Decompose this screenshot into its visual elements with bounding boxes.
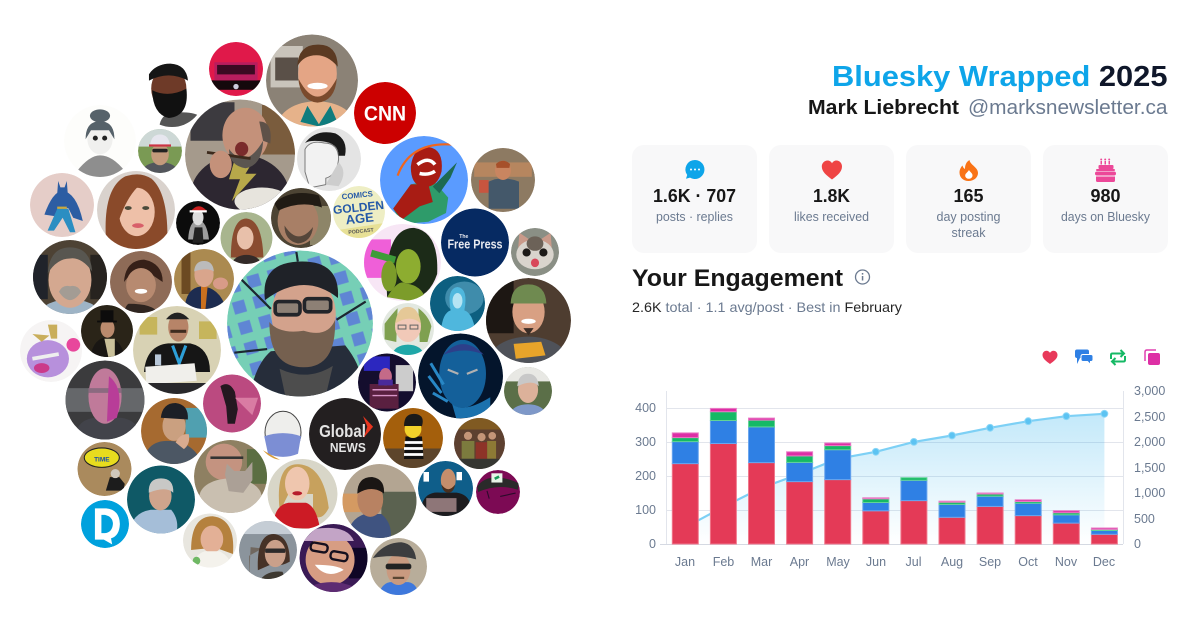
avatar: purple comic creature bbox=[20, 320, 82, 382]
stat value: 1.6K · 707 bbox=[653, 186, 736, 206]
cumulative area bbox=[685, 414, 1104, 544]
stat label: posts · replies bbox=[656, 210, 733, 224]
bars: replies bbox=[672, 420, 1117, 534]
icon: birthday cake bbox=[1095, 158, 1116, 182]
avatar: man in expos cap bbox=[138, 129, 182, 173]
month labels bbox=[675, 555, 1115, 569]
icon: info bbox=[856, 270, 870, 284]
avatar: woman with glasses on city rooftop bbox=[239, 521, 297, 579]
avatar: blue hooded figure bbox=[430, 276, 485, 331]
avatar: man in top hat bbox=[81, 305, 133, 357]
avatar: blue mystique cosplay bbox=[418, 334, 503, 418]
right axis labels: 2,500 bbox=[1134, 410, 1165, 424]
stat label: likes received bbox=[794, 210, 869, 224]
avatar: smiling woman with dark hair bbox=[110, 251, 172, 313]
right axis labels: 500 bbox=[1134, 512, 1155, 526]
avatar: line drawing of man bbox=[297, 127, 361, 191]
right axis labels: 0 bbox=[1134, 537, 1141, 551]
avatar: man in comic shop bbox=[471, 148, 535, 212]
left axis labels bbox=[635, 401, 656, 551]
avatar: man in dark cap close-up bbox=[271, 188, 331, 248]
right axis labels: 2,000 bbox=[1134, 435, 1165, 449]
avatar: man in cap resting chin on hand bbox=[141, 398, 207, 464]
panel: posts and replies stat bbox=[632, 145, 757, 253]
month labels: Feb bbox=[713, 555, 734, 569]
month labels: Oct bbox=[1018, 555, 1038, 569]
avatar: comedy time pin bbox=[78, 442, 132, 496]
icon: flame bbox=[960, 160, 978, 181]
avatar: Star Trek crew group photo bbox=[454, 418, 505, 469]
left axis labels: 300 bbox=[635, 435, 656, 449]
left axis labels: 400 bbox=[635, 401, 656, 415]
stat label second line: streak bbox=[952, 226, 986, 240]
avatar: man in X-Men shirt bbox=[486, 278, 571, 363]
panel: posting streak stat bbox=[906, 145, 1031, 253]
avatar: red-haired woman on green bbox=[220, 212, 272, 264]
month labels: Apr bbox=[790, 555, 809, 569]
stacked bar and line chart bbox=[635, 384, 1165, 569]
avatar: man in cap and sunglasses bbox=[370, 538, 427, 595]
avatar: main profile, man in cap under plaid umbrella bbox=[227, 250, 373, 396]
heading: your engagement: Your Engagement bbox=[632, 265, 843, 292]
stat label: days on Bluesky bbox=[1061, 210, 1151, 224]
avatar: gambit comic art bbox=[203, 374, 261, 432]
avatar: cartoon yellow burglar bbox=[383, 408, 443, 470]
stat label: day posting bbox=[936, 210, 1001, 224]
bars: quotes bbox=[672, 408, 1117, 529]
avatar: she-hulk comic art bbox=[364, 224, 441, 301]
month labels: Jul bbox=[906, 555, 921, 569]
legend icon: likes heart bbox=[1042, 351, 1058, 364]
avatar: politician pointing bbox=[174, 249, 234, 309]
left axis labels: 0 bbox=[649, 537, 656, 551]
right axis labels bbox=[1134, 384, 1165, 551]
avatar: grey-haired man smiling bbox=[33, 240, 107, 314]
icon: speech bubble bbox=[685, 160, 704, 179]
month labels: Dec bbox=[1093, 555, 1115, 569]
avatar: smiling man with glasses, purple tone bbox=[300, 524, 368, 592]
avatar: figure in purple-lit room bbox=[358, 354, 416, 412]
chart legend bbox=[1042, 350, 1160, 365]
avatar: sketch of woman with hair bun bbox=[78, 109, 123, 177]
stat value: 1.8K bbox=[813, 186, 850, 206]
avatar: blonde woman in red bbox=[268, 459, 338, 529]
right axis labels: 1,500 bbox=[1134, 461, 1165, 475]
avatar: santa hat figure in black and white bbox=[176, 201, 220, 245]
avatar: cartoon blonde woman with glasses bbox=[382, 303, 434, 355]
user name: Mark Liebrecht bbox=[808, 97, 959, 119]
legend icon: quotes copy squares bbox=[1145, 350, 1160, 365]
y grid bbox=[660, 391, 1124, 544]
engagement summary: 2.6K total · 1.1 avg/post · Best in February bbox=[632, 299, 902, 315]
avatar: man at Comic-Con panel bbox=[133, 306, 221, 394]
icon: heart bbox=[822, 160, 842, 180]
stat value: 165 bbox=[954, 186, 984, 206]
bars: likes bbox=[672, 444, 1117, 544]
cumulative line bbox=[685, 414, 1104, 527]
avatar: Global News logo bbox=[309, 398, 381, 470]
avatar: green and red comic hero bbox=[380, 136, 468, 224]
left axis labels: 100 bbox=[635, 503, 656, 517]
avatar: CNN logo bbox=[354, 82, 416, 144]
right axis labels: 3,000 bbox=[1134, 384, 1165, 398]
panel: days on Bluesky stat bbox=[1043, 145, 1168, 253]
month labels: Mar bbox=[751, 555, 772, 569]
title: Bluesky Wrapped 2025 bbox=[832, 61, 1168, 93]
avatar: bald man with magenta light bbox=[66, 360, 144, 440]
month labels: Aug bbox=[941, 555, 963, 569]
avatar: be reality logo bbox=[209, 42, 263, 96]
avatar: curly-haired woman bbox=[183, 514, 237, 568]
month labels: Jan bbox=[675, 555, 695, 569]
avatar: man holding grey cat bbox=[194, 440, 267, 515]
avatar: purple cartoon in hat bbox=[476, 470, 520, 514]
user handle: @marksnewsletter.ca bbox=[968, 97, 1168, 119]
left axis labels: 200 bbox=[635, 469, 656, 483]
avatar: man with collectibles shelf bbox=[266, 34, 358, 126]
stat value: 980 bbox=[1090, 186, 1120, 206]
bars: reposts bbox=[672, 412, 1117, 530]
month labels: Nov bbox=[1055, 555, 1078, 569]
legend icon: replies chat bubbles bbox=[1075, 350, 1093, 364]
month labels: Jun bbox=[866, 555, 886, 569]
month labels: May bbox=[826, 555, 851, 569]
panel: likes received stat bbox=[769, 145, 894, 253]
panel: avatar bubble cluster bbox=[20, 34, 571, 595]
avatar: red-haired woman bbox=[97, 171, 175, 249]
avatar: The Free Press logo bbox=[441, 208, 509, 276]
avatar: man in front of teal wall bbox=[127, 466, 195, 534]
avatar: man at sunset bbox=[342, 464, 416, 538]
avatar: sketch of masked man bbox=[263, 410, 302, 460]
avatar: surprised cat bbox=[511, 228, 559, 276]
right axis labels: 1,000 bbox=[1134, 486, 1165, 500]
avatar: older man smiling, green background bbox=[504, 367, 552, 415]
cumulative points bbox=[872, 410, 1108, 455]
avatar: batman action figure bbox=[30, 173, 94, 237]
month labels: Sep bbox=[979, 555, 1001, 569]
avatar: cartoon bearded man bbox=[148, 64, 198, 127]
avatar: man eating with chopsticks bbox=[185, 100, 295, 210]
avatar: Disqus logo bbox=[81, 500, 129, 548]
legend icon: reposts arrows bbox=[1111, 350, 1125, 365]
avatar: comics of the golden age podcast bbox=[332, 186, 385, 238]
avatar: man holding comics bbox=[418, 461, 473, 516]
